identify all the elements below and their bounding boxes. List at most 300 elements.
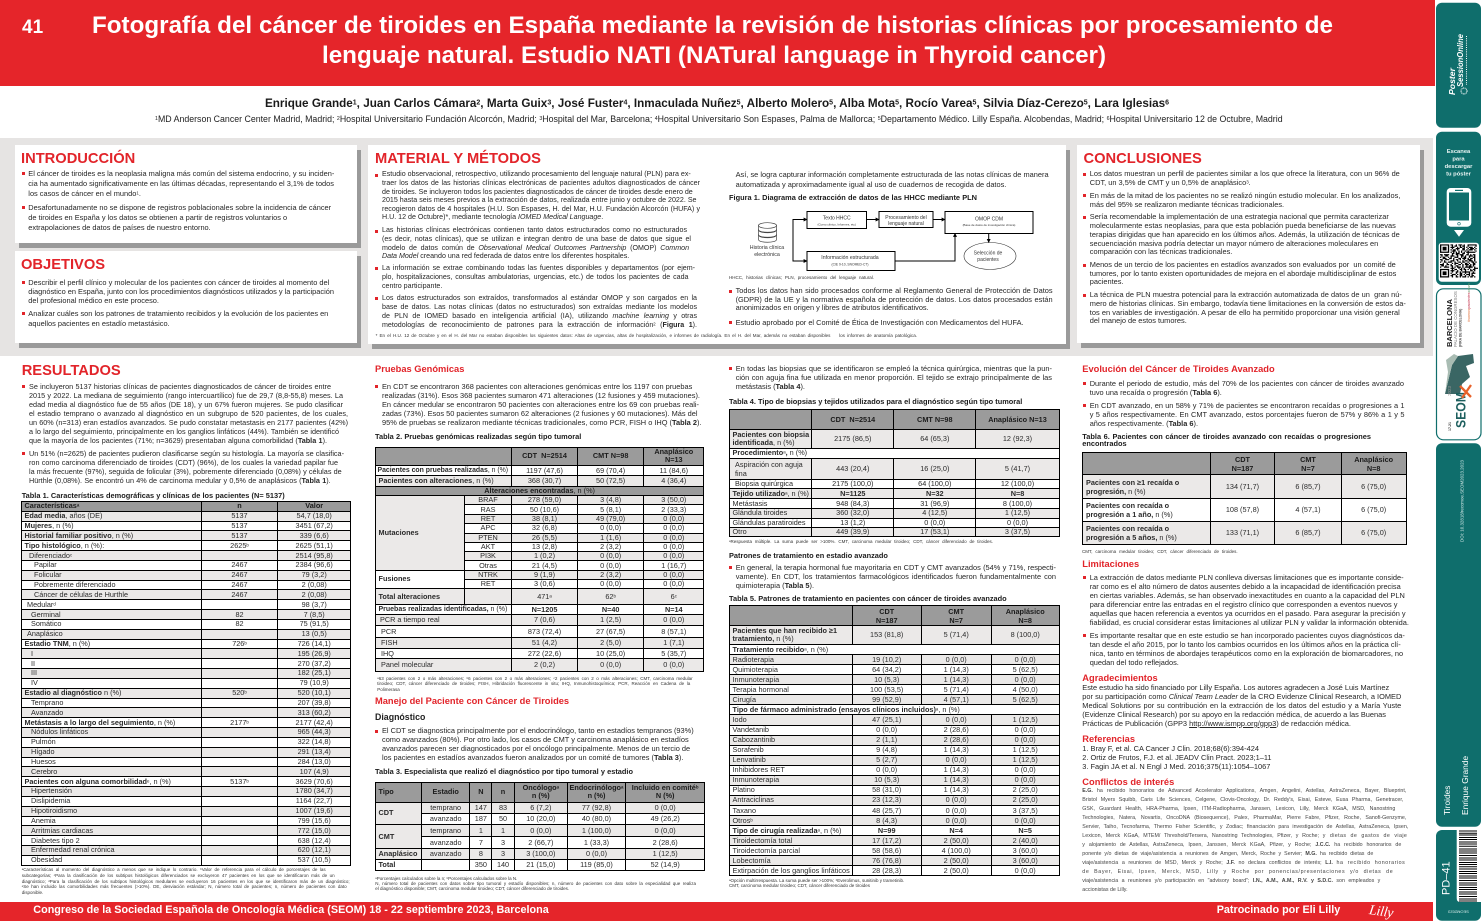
table 3: especialista: 187 xyxy=(475,814,487,823)
table 5: tratamiento: Terapia hormonal xyxy=(732,685,789,694)
table 6: recaídas: 6 (75,0) xyxy=(1361,528,1386,537)
table 4: biopsias: Anaplásico N=13 xyxy=(988,414,1047,424)
text: conflictos de interés: Technologies, Natera, Novartis, OncoDNA (Biosequence), Palex, PharmaMar, Pierre Fabre, Pfizer, Roche, Sanofi-Genzyme, xyxy=(1082,814,1406,820)
table 4: biopsias: Aspiración con aguja xyxy=(735,460,803,469)
table 2: pruebas genómicas: 1197 (47,6) xyxy=(526,466,563,475)
table 1: características: 3629 (70,6) xyxy=(296,777,333,786)
table 6: recaídas: Pacientes con recaída o xyxy=(1086,524,1169,533)
table 1: características: 2625 (51,1) xyxy=(296,541,333,550)
table 1: características: Estadio TNM, n (%) xyxy=(24,639,90,648)
table 5: tratamiento: N=99 xyxy=(878,826,896,835)
panel: resultados xyxy=(21,363,1409,895)
table 3: especialista: 0 (0,0) xyxy=(655,826,676,835)
table 4: biopsias: 948 (84,3) xyxy=(836,499,869,508)
table 5: tratamiento: 76 (76,8) xyxy=(872,856,901,865)
heading: objetivos: OBJETIVOS xyxy=(21,257,105,273)
table 2: pruebas genómicas: PCR a tiempo real xyxy=(380,615,440,624)
table 5: tratamiento: N=5 xyxy=(1018,826,1032,835)
table 3: especialista: 0 (0,0) xyxy=(530,826,551,835)
table 2: pruebas genómicas: PCR xyxy=(381,627,396,636)
table 5: tratamiento: 8 (4,3) xyxy=(876,816,897,825)
table 1: características: 98 (3,7) xyxy=(302,600,327,609)
text: diagnóstico bullet: El CDT se diagnostica principalmente por el endocrinólogo, tanto en estadíos tempranos (93%) xyxy=(382,726,694,735)
table 6: recaídas: N=187 xyxy=(1232,464,1253,472)
table 1: características: Germinal xyxy=(31,610,61,619)
table 4: biopsias: 2175 (86,5) xyxy=(834,434,871,443)
text: GDPR bullet: anonimizados en origen y libres de atributos identificativos. xyxy=(736,303,929,312)
text: conflictos de interés: de Bayer, Eisai, Ipsen, Merck, MSD, Lilly y Roche por ponencias/presentaciones y/o dietas de xyxy=(1082,868,1393,874)
panel: SEOM Barcelona: (FIRA DE BARCELONA) xyxy=(1458,309,1462,347)
panel: material y métodos xyxy=(368,145,1066,344)
table 3: especialista: Total xyxy=(378,860,395,869)
footnote: table 6: CMT, carcinoma medular tiroideo; CDT, cáncer diferenciado de tiroides. xyxy=(1082,548,1238,554)
table 2: pruebas genómicas: CMT N=98 xyxy=(593,451,628,460)
text: evolución bullet 1: tuvo una recaída o progresión (Tabla 6). xyxy=(1090,388,1222,397)
table 5: tratamiento: 10 (5,3) xyxy=(874,775,899,784)
text: resultados bullet 1: que la mayoría de los pacientes (71%; n=3629) presentaban alguna comorbilidad (Tabla 1). xyxy=(29,436,327,445)
text: agradecimientos: (Evidenze Clinical Research) por su apoyo en la redacción médica, de acuerdo a las Buenas xyxy=(1082,710,1386,719)
text: conflictos de interés: Servier, Taiho, Tecnofarma, Thermo Fisher Scientific, y Zodiac; financiación para investigación de Astellas, AstraZeneca, Ipsen, xyxy=(1082,824,1408,830)
table 1: características: Arritmias cardiacas xyxy=(31,826,93,835)
panel: SEOM Barcelona xyxy=(1436,283,1481,440)
table 5: tratamiento: CMT xyxy=(948,606,964,616)
icon: barcode xyxy=(1459,831,1477,901)
table 1: características: 1007 (19,6) xyxy=(296,806,333,815)
table 6: recaídas: 133 (71,1) xyxy=(1226,528,1259,537)
table 5: tratamiento: 3 (60,0) xyxy=(1013,846,1038,855)
table 3: especialista xyxy=(375,782,705,871)
subheading: diagnóstico: Diagnóstico xyxy=(375,712,425,722)
table 2: pruebas genómicas: Anaplásico xyxy=(654,447,693,456)
table 2: pruebas genómicas: 1 (2,5) xyxy=(600,615,621,624)
table 2: pruebas genómicas xyxy=(375,447,704,672)
table 3: especialista: 50 xyxy=(499,814,507,823)
footnote: table 5: CMT, carcinoma medular tiroideo; CDT, cáncer diferenciado de tiroides xyxy=(729,883,870,888)
panel: introducción xyxy=(15,145,357,243)
text: biopsias bullet: ción con aguja fina fue utilizada en menor proporción. El tejido se extrajo principalmente de las xyxy=(736,373,1052,382)
table 2: pruebas genómicas: 272 (22,6) xyxy=(528,649,561,658)
panel: topic and author: Enrique Grande xyxy=(1460,756,1470,815)
box: texto HHCC: (Curso clínico, Informes, etc) xyxy=(818,222,856,226)
table 1: características: 2 (0,08) xyxy=(302,590,327,599)
text: agradecimientos: Prácticas de Publicación (GPP3 http://www.ismpp.org/gpp3) de redacción médica. xyxy=(1082,719,1351,728)
box: texto HHCC xyxy=(807,212,866,228)
table 3: especialista: 140 xyxy=(497,860,509,869)
table 1: características: 207 (39,8) xyxy=(298,698,331,707)
table 4: biopsias: 4 (12,5) xyxy=(922,508,947,517)
table 5: tratamiento: Inmunoterapia xyxy=(732,675,779,684)
text: evolución bullet 1: Durante el periodo de estudio, más del 70% de los pacientes con cáncer de tiroides avanzado xyxy=(1090,379,1404,388)
panel: objetivos xyxy=(15,251,357,343)
text: agradecimientos: Medical Solutions por su contribución en la extracción de los datos del estudio y a María Yuste xyxy=(1082,701,1401,710)
table 2: pruebas genómicas: 1 (7,1) xyxy=(663,638,684,647)
table 5: tratamiento: 47 (25,1) xyxy=(872,715,901,724)
table 3: especialista: avanzado xyxy=(430,838,462,847)
figure title: Figura 1. Diagrama de extracción de datos de las HHCC mediante PLN xyxy=(729,193,977,202)
table 3: especialista: 77 (92,8) xyxy=(582,803,611,812)
table 3: especialista: 1 (12,5) xyxy=(653,849,678,858)
table 1: características: Hipotiroidismo xyxy=(31,806,77,815)
table 3: especialista: N (%) xyxy=(656,791,674,800)
table 4: biopsias: 8 (100,0) xyxy=(1003,499,1032,508)
table 1: características: Folicular xyxy=(34,570,62,579)
table 5: tratamiento: tratamiento, n (%) xyxy=(732,634,794,643)
logo: SEOM xyxy=(1445,354,1474,431)
text: conclusión 3 xyxy=(1090,213,1400,257)
table 1: características: 799 (15,6) xyxy=(298,816,331,825)
table 5: tratamiento: 58 (58,6) xyxy=(872,846,901,855)
table 6: recaídas: CMT xyxy=(1300,454,1316,464)
footnote: table 3: aPorcentajes calculados sobre la n; bPorcentajes calculados sobre la N. xyxy=(375,876,517,880)
table 5: tratamiento: Sorafenib xyxy=(732,745,764,754)
table 1: características: 2467 xyxy=(231,580,248,589)
table 5: tratamiento xyxy=(729,605,1060,876)
table 5: tratamiento: 48 (25,7) xyxy=(872,806,901,815)
table 2: pruebas genómicas: 32 (6,8) xyxy=(532,524,557,532)
footnote: table 1: subcategorías; cPara la clasificación de los subtipos histológicos diferenciados se excluyeron 47 pacientes en los que se identificaron más de un xyxy=(22,873,335,878)
table 5: tratamiento: Radioterapia xyxy=(732,655,774,664)
authors: Enrique Grande1, Juan Carlos Cámara2, Marta Guix3, José Fuster4, Inmaculada Nuñez5, Alberto Molero5, Alba Mota5, Rocío Varea5, Silvia Díaz-Cerezo5, Lara Iglesias6 xyxy=(265,97,1169,110)
table 4: biopsias: 16 (25,0) xyxy=(920,464,949,473)
text: métodos bullet 1: 2015 hasta seis meses previos a la extracción de datos, realizada entre junio y octubre de 2022. Se xyxy=(382,196,696,204)
text: intro bullet 2: Desafortunadamente no se dispone de registros poblacionales sobre la incidencia de cáncer xyxy=(28,203,331,212)
table 1: características: II xyxy=(31,659,35,668)
sidebar xyxy=(1436,2,1482,921)
table 5: tratamiento: 2 (25,0) xyxy=(1013,795,1038,804)
table 4: biopsias: Metástasis xyxy=(732,499,767,508)
table 3: especialista: n xyxy=(501,787,505,796)
text: limitaciones bullet 2: Es importante resaltar que en este estudio se han incorporado pacientes cuyos diagnósticos da- xyxy=(1090,631,1405,640)
table 5: tratamiento: Antraciclinas xyxy=(732,795,774,804)
box: OMOP CDM: (Base de datos de investigación clínica) xyxy=(963,223,1015,227)
text: resultados bullet 1 xyxy=(29,382,348,445)
table 1: características: 520b xyxy=(232,688,247,697)
subheading: patrones de tratamiento: Patrones de tratamiento en estadio avanzado xyxy=(729,551,888,560)
table 5: tratamiento: Pacientes que han recibido ≥1 xyxy=(732,626,837,634)
table 2: pruebas genómicas: 51 (4,2) xyxy=(532,638,557,647)
table 3: especialista: n (%) xyxy=(532,791,550,800)
text: limitaciones bullet 1: para diferenciar entre las entradas en el registro clínico que corresponden a eventos nuevos y xyxy=(1090,600,1397,609)
table 5: tratamiento: 64 (34,2) xyxy=(872,665,901,674)
text: intro bullet 1: cia ha aumentado significativamente en las últimas décadas, representando el 3,1% de todos xyxy=(28,179,334,188)
table 1: características: 195 (26,9) xyxy=(298,649,331,658)
icon: phone xyxy=(1447,188,1471,227)
table 5: tratamiento: CDT xyxy=(879,606,894,616)
heading: conclusiones: CONCLUSIONES xyxy=(1084,151,1202,167)
table 5: tratamiento: 1 (14,3) xyxy=(944,785,969,794)
text: limitaciones bullet 2 xyxy=(1090,631,1404,667)
table 3: especialista: 7 xyxy=(479,838,483,847)
footnote: table 1: aCaracterísticas al momento del diagnóstico a menos que se indique lo contrario. bValor de referencia para el cálculo de porcentajes de las xyxy=(22,867,326,872)
text: conclusión 4 xyxy=(1090,261,1396,287)
table 3: especialista: 1 xyxy=(501,826,505,835)
title: Fotografía del cáncer de tiroides en España mediante la revisión de historias clínicas por procesamiento de xyxy=(92,12,1333,39)
table 3: especialista: Incluido en comitéb xyxy=(632,783,699,792)
table 5: tratamiento: 3 (37,5) xyxy=(1013,806,1038,815)
table 4: biopsias xyxy=(729,409,1060,537)
footnote: table 3 xyxy=(375,876,696,891)
table 4: biopsias: 443 (20,4) xyxy=(836,464,869,473)
table 2: pruebas genómicas: 5 (8,1) xyxy=(600,505,621,514)
icon: QR code xyxy=(1439,243,1479,282)
heading: evolución: Evolución del Cáncer de Tiroides Avanzado xyxy=(1082,364,1275,374)
table 1: características: 291 (13,4) xyxy=(298,747,331,756)
table 1: características: 726b xyxy=(232,639,247,648)
footnote: table 2: Polimerasa xyxy=(377,686,400,692)
text: patrones bullet: vamente). En CDT, los tratamientos farmacológicos identificados fueron fundamentalmente con xyxy=(736,572,1056,581)
table title 4: Tabla 4. Tipo de biopsias y tejidos utilizados para el diagnóstico según tipo tumoral xyxy=(729,397,1022,406)
text: conclusión 2 xyxy=(1090,191,1400,209)
table 2: pruebas genómicas: 10 (25,0) xyxy=(596,649,625,658)
text: resultados bullet 1: un 60% (n=313) eran estadíos avanzados. Se pudo constatar metastasis en 2177 pacientes (42%) xyxy=(29,418,348,427)
text: pruebas genómicas bullet: 95% de pruebas se realizaron mediante técnicas tradicionales, como PCR, FISH o IHQ (Tabla 2). xyxy=(382,418,701,427)
table 5: tratamiento: 100 (53,5) xyxy=(870,685,903,694)
text: conclusión 4: pacientes. xyxy=(1090,277,1124,286)
table 1: características: Papilar xyxy=(34,560,57,569)
text: agradecimientos: por su participación como Clinical Team Leader de la CRO Evidenze Clinical Research, a IOMED xyxy=(1082,692,1401,701)
text: captura de información xyxy=(736,170,1049,189)
table 5: tratamiento: 0 (0,0) xyxy=(876,765,897,774)
table 5: tratamiento: Lenvatinib xyxy=(732,755,766,764)
table 5: tratamiento: 0 (0,0) xyxy=(1015,775,1036,784)
panel: poster code and barcode: PD–41 xyxy=(1440,861,1452,895)
table 2: pruebas genómicas: 0 (0,0) xyxy=(663,615,684,624)
text: métodos bullet 3 xyxy=(382,264,695,291)
table 3: especialista: 147 xyxy=(475,803,487,812)
box: procesamiento del lenguaje natural: lenguaje natural xyxy=(888,221,924,227)
text: resultados bullet 2 xyxy=(29,449,344,485)
heading: resultados: RESULTADOS xyxy=(22,363,121,379)
text: limitaciones bullet 1: aquellas que hacen referencia a eventos ya ocurridos en el pasado. Para asegurar la precisión y xyxy=(1090,609,1406,618)
table 3: especialista: 1 xyxy=(479,826,483,835)
footnote: table 5 xyxy=(729,878,904,888)
table 3: especialista: 52 (14,9) xyxy=(651,860,680,869)
text: resultados bullet 1: el estadio temprano o avanzado al diagnóstico en un subgrupo de 520 pacientes, de los cuales, xyxy=(29,409,348,418)
table 1: características: 5137 xyxy=(231,531,248,540)
table 6: recaídas: 6 (85,7) xyxy=(1295,482,1321,490)
table 2: pruebas genómicas: 0 (0,0) xyxy=(600,660,621,669)
panel: topic and author: DOI: 10.32818/reccmoe.SEOM2023.2023 xyxy=(1460,460,1464,542)
table 2: pruebas genómicas: 471a xyxy=(537,592,552,601)
text: conclusión 1: Los datos muestran un perfil de pacientes similar a los que ofrece la literatura, con un 96% de xyxy=(1090,169,1400,178)
footnote: table 1: diagnóstico; dPara la clasificación de los subtipos histológicos medulares se excluyeron 16 pacientes en los que se identificaron más de un diagnóstico; xyxy=(22,879,350,884)
table 2: pruebas genómicas: Total alteraciones xyxy=(378,592,440,601)
table 1: características: 1164 (22,7) xyxy=(296,796,333,805)
text: intro bullet 1: El cáncer de tiroides es la neoplasia maligna más común del sistema endocrino, y su inciden- xyxy=(28,169,334,178)
text: limitaciones bullet 2: tan desde el año 2015, por lo tanto los cambios ocurridos en los últimos años en la práctica clí- xyxy=(1090,640,1401,649)
table 5: tratamiento: Inhibidores RET xyxy=(732,765,785,774)
text: conclusión 4: tumores, por lo tanto existen oportunidades de mejora en el abordaje multidisciplinar de estos xyxy=(1090,269,1396,278)
table 5: tratamiento: 2 (50,0) xyxy=(944,836,969,845)
text: conflictos de interés: y alojamiento de Astellas, AstraZeneca, Ipsen, Janssen, Merck KGaA, Pfizer, y Roche; J.C.C. ha recibido honorarios de xyxy=(1082,842,1401,848)
arrows xyxy=(793,220,989,261)
table 5: tratamiento: 2 (28,6) xyxy=(944,725,969,734)
table 1: características: 322 (14,8) xyxy=(298,737,331,746)
table 1: características: Mujeres, n (%) xyxy=(24,521,74,530)
table 2: pruebas genómicas: 11 (84,6) xyxy=(659,466,688,475)
text: conclusión 3: Sería recomendable la implementación de una estrategia nacional que permita caracterizar xyxy=(1090,212,1389,221)
box: OMOP CDM xyxy=(945,212,1033,234)
logo: SEOM: 2023 xyxy=(1447,385,1452,396)
table 1: características: 537 (10,5) xyxy=(298,855,331,864)
text: limitaciones bullet 2: quedan del todo reflejados. xyxy=(1090,658,1179,667)
box: procesamiento del lenguaje natural: Procesamiento del xyxy=(885,215,927,221)
table 1: características: Temprano xyxy=(31,698,63,707)
table 2: pruebas genómicas: Mutaciones xyxy=(378,528,419,537)
ellipse: selección de pacientes: pacientes xyxy=(977,257,999,263)
table 1: características: Enfermedad renal crónica xyxy=(31,845,115,854)
text: métodos bullet 2: (es decir, notas clínicas), que se utilizan e integran dentro de una base de datos que sigue el xyxy=(382,235,691,243)
text: limitaciones bullet 1: La extracción de datos mediante PLN conlleva diversas limitaciones que es importante conside- xyxy=(1090,573,1404,582)
table 3: especialista: temprano xyxy=(430,826,461,835)
table 3: especialista: 1 (100,0) xyxy=(582,826,611,835)
text: referencias: 1. Bray F, et al. CA Cancer J Clin. 2018;68(6):394-424 xyxy=(1082,744,1259,753)
table 4: biopsias: Tejido utilizadoa, n (%) xyxy=(732,489,809,498)
table 5: tratamiento: Tiroidectomía parcial xyxy=(732,846,800,855)
table 3: especialista: Tipo xyxy=(378,787,394,796)
text: intro bullet 2 xyxy=(28,203,324,233)
affiliations: 1MD Anderson Cancer Center Madrid, Madrid; 2Hospital Universitario Fundación Alcorcón, Madrid; 3Hospital del Mar, Barcelona; 4Hospital Universitario Son Espases, Palma de Mallorca; 5Departamento Médico. Lilly España. Alcobendas, Madrid; 6Hospital Universitario 12 de Octubre, Madrid xyxy=(155,114,1283,124)
footnote: table 2: a63 pacientes con 2 o más alteraciones; b6 pacientes con 2 o más alteraciones; c2 pacientes con 2 o más alteraciones; CMT, carcinoma medular xyxy=(377,676,693,680)
table 1: características: 1780 (34,7) xyxy=(296,787,333,795)
table 4: biopsias: Procedimientoa, n (%) xyxy=(732,448,807,457)
text: objetivos bullet 2: aquellos pacientes en estadío metastásico. xyxy=(28,319,170,328)
table 5: tratamiento: 0 (0,0) xyxy=(1015,655,1036,664)
footer: congress: Congreso de la Sociedad Española de Oncología Médica (SEOM) 18 - 22 septiembre 2023, Barcelona xyxy=(33,904,549,916)
table 1: características: Tipo histológico, n (%): xyxy=(24,541,104,550)
table 6: recaídas: 4 (57,1) xyxy=(1295,505,1321,514)
icon: database xyxy=(758,223,776,242)
table 5: tratamiento: 2 (50,0) xyxy=(944,866,969,875)
box: información estructurada: (CIE 9-10, SNOMED-CT) xyxy=(831,262,869,266)
text: diagnóstico bullet: avanzados parecen ser diagnosticados por el oncólogo principalmente. Menos de un tercio de xyxy=(382,744,690,753)
text: conclusión 2: En más de la mitad de los pacientes no se realizó ningún estudio molecular. En los analizados, xyxy=(1090,191,1400,200)
table 4: biopsias: Glándula tiroides xyxy=(732,508,787,517)
text: conclusión 3: molecularmente estas neoplasias, para que esta población pueda beneficiarse de las nuevas xyxy=(1090,221,1396,230)
heading: material y métodos: MATERIAL Y MÉTODOS xyxy=(375,151,541,167)
table 5: tratamiento: 0 (0,0) xyxy=(946,816,967,825)
table 1: características: 79 (3,2) xyxy=(302,570,327,579)
panel: conclusiones xyxy=(1077,145,1420,343)
box: información estructurada xyxy=(807,252,895,270)
footer: sponsor: Patrocinado por Eli Lilly xyxy=(1217,904,1340,916)
table 2: pruebas genómicas: APC xyxy=(480,524,496,532)
table 2: pruebas genómicas: N=40 xyxy=(602,605,619,614)
footnote: table 2 xyxy=(377,676,693,692)
panel: poster code and barcode: SEOM2023 xyxy=(1447,910,1469,914)
text: biopsias bullet xyxy=(736,364,1052,391)
table 3: especialista: Endocrinólogoa xyxy=(570,783,623,792)
text: resultados bullet 2: la más frecuente (97%), seguida de folicular (3%), pobremente diferenciado (0,08%) y células de xyxy=(29,467,342,476)
table 3: especialista: 2 (28,6) xyxy=(653,838,678,847)
text: limitaciones bullet 1: fiabilidad, es crucial considerar estas limitaciones al utilizar PLN y validar la información obtenida. xyxy=(1090,618,1409,627)
table 6: recaídas: Pacientes con recaída o xyxy=(1086,501,1169,510)
table 5: tratamiento: 1 (12,5) xyxy=(1013,745,1038,754)
label: historia clínica electrónica: Historia clínica xyxy=(750,245,784,251)
table 5: tratamiento: 4 (50,0) xyxy=(1013,685,1038,694)
text: métodos bullet 1: Estudio observacional, retrospectivo, utilizando procesamiento del lenguaje natural (PLN) para ex- xyxy=(382,170,691,178)
text: conclusión 5 xyxy=(1090,291,1406,326)
text: ética bullet: Estudio aprobado por el Comité de Ética de Investigación con Medicamentos del HUFA. xyxy=(736,318,1024,327)
panel: scan to download xyxy=(1436,132,1481,285)
table 5: tratamiento: 0 (0,0) xyxy=(1015,735,1036,744)
heading: conflictos de interés: Conflictos de interés xyxy=(1082,777,1174,787)
table 1: características: IV xyxy=(31,678,38,687)
table 5: tratamiento: 1 (14,3) xyxy=(944,665,969,674)
table 3: especialista: Oncólogoa xyxy=(523,783,559,792)
footer banner xyxy=(0,902,1433,921)
footnote: table 3: el diagnóstico disponible; CMT, carcinoma medular tiroideo; CDT, cáncer diferenciado de tiroides. xyxy=(375,886,569,890)
table 5: tratamiento: Cabozantinib xyxy=(732,735,775,744)
table 1: características: 7 (8,5) xyxy=(304,610,325,619)
table 2: pruebas genómicas: 2 (5,0) xyxy=(600,638,621,647)
title: lenguaje natural. Estudio NATI (NATural language in Thyroid cancer) xyxy=(322,42,1106,69)
text: conflictos de interés: GSK, Guardant Health, HRA-Pharma, Ipsen, ITM-Radiopharma, Janssen, Lexicon, Lilly, Merck KGaA, MSD, Nanostring xyxy=(1082,806,1395,812)
table 5: tratamiento: 0 (0,0) xyxy=(876,725,897,734)
table 5: tratamiento: 0 (0,0) xyxy=(946,806,967,815)
text: conclusión 4: Menos de un tercio de los pacientes en estadíos avanzados son evaluados por un comité de xyxy=(1090,260,1396,269)
table 5: tratamiento: 1 (14,3) xyxy=(944,765,969,774)
panel: scan to download: Escanea xyxy=(1447,149,1471,155)
table 2: pruebas genómicas: 368 (30,7) xyxy=(528,476,561,485)
text: intro bullet 1: los casos de cáncer en el mundo1. xyxy=(28,189,141,198)
text: evolución bullet 2: y 5 años respectivamente. En CMT avanzado, estos porcentajes fueron de 57% y 86% a 1 y 5 xyxy=(1090,410,1404,419)
table 5: tratamiento: 28 (28,3) xyxy=(872,866,901,875)
table 1: características: Anaplásico xyxy=(27,629,63,638)
table 4: biopsias: identificada, n (%) xyxy=(732,438,795,447)
table 5: tratamiento: 1 (12,5) xyxy=(1013,755,1038,764)
table 2: pruebas genómicas: 873 (72,4) xyxy=(528,627,561,636)
table 5: tratamiento: N=8 xyxy=(1018,616,1032,624)
text: conflictos de interés xyxy=(1082,788,1408,892)
text: patrones bullet: En general, la terapia hormonal fue mayoritaria en CDT y CMT avanzados (54% y 71%, respecti- xyxy=(736,563,1056,572)
table 5: tratamiento: 19 (10,2) xyxy=(872,655,901,664)
table title 6: encontrados xyxy=(1082,439,1127,448)
table 1: características: 2467 xyxy=(231,560,248,569)
text: captura de información: automatizada y aproximadamente igual al uso de cuadernos de recogida de datos. xyxy=(736,180,1006,189)
panel: SEOM Barcelona: BARCELONA xyxy=(1445,299,1454,347)
table 2: pruebas genómicas: N=13 xyxy=(665,455,683,464)
logo: SEOM: SEOM xyxy=(1452,392,1468,428)
table 5: tratamiento: 1 (14,3) xyxy=(944,745,969,754)
text: métodos bullet 4 xyxy=(382,294,697,329)
table 1: características: Historial familiar positivo, n (%) xyxy=(24,531,133,540)
table 2: pruebas genómicas: IHQ xyxy=(381,649,394,658)
text: conflictos de interés: Lexicon, Merck KGaA, MTEM/ Threshold/Tersera, Nanostring Technologies, Pfizer, y Roche; y dietas de gastos de viaje xyxy=(1082,832,1407,838)
text: métodos bullet 3: La información se extrae combinando todas las fuentes disponibles y departamentos (por ejem- xyxy=(382,264,695,272)
table 3: especialista: 40 (80,0) xyxy=(582,814,611,823)
table 5: tratamiento: Inmunoterapia xyxy=(732,775,779,784)
text: métodos bullet 4: base de datos. Las notas clínicas (datos no estructurados) son extraídas mediante los modelos xyxy=(382,303,697,311)
table 3: especialista: N xyxy=(478,787,484,796)
table 5: tratamiento: 8 (100,0) xyxy=(1011,630,1040,639)
table 2: pruebas genómicas: 50 (72,5) xyxy=(596,476,625,485)
text: evolución bullet 2: En CDT avanzado, en un 58% y 71% de pacientes se encontraron recaídas o progresiones a 1 xyxy=(1090,401,1404,410)
text: métodos bullet 1: H.U. 12 de Octubre)*, mediante tecnología IOMED Medical Language. xyxy=(382,213,603,221)
text: patrones bullet xyxy=(736,563,1056,590)
text: métodos bullet 4: de PLN de IOMED basado en inteligencia artificial (IA), utilizando machine learning y otras xyxy=(382,312,697,320)
text: métodos bullet 2: modelo de datos común de Observational Medical Outcomes Partnership (OMOP) Common xyxy=(382,244,689,252)
panel: SEOM Barcelona: #somospacientesseom xyxy=(1467,283,1471,322)
table 5: tratamiento: 0 (0,0) xyxy=(946,795,967,804)
table 6: recaídas: Pacientes con ≥1 recaída o xyxy=(1086,478,1179,486)
text: objetivos bullet 1 xyxy=(28,278,331,305)
table 5: tratamiento: Anaplásico xyxy=(1006,606,1045,616)
table 5: tratamiento: Extirpación de los ganglios linfáticos xyxy=(732,866,850,875)
table 1: características: 2 (0,08) xyxy=(302,580,327,589)
footnote: table 5: aOpción multirrespuesta. La suma puede ser >100%; bEverolimus, sunitinib y trametinib. xyxy=(729,878,904,883)
text: conflictos de interés: viaje/asistencia a reuniones y/o participación en "advisory board"; I.N., A.M., A.M., R.V. y S.D.C. son empleados y xyxy=(1082,878,1380,884)
